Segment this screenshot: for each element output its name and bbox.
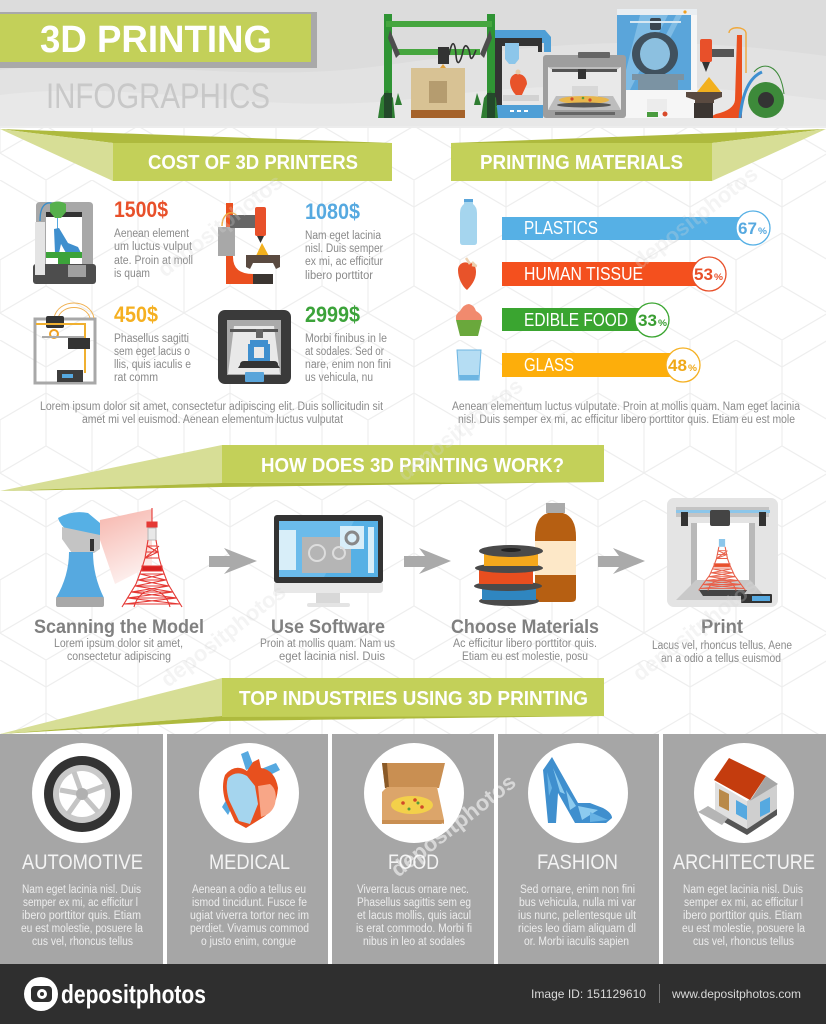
watermarks: depositphotos <box>628 573 762 686</box>
bar: plastics: % <box>758 226 767 236</box>
price: 450$: 450$ <box>114 302 158 327</box>
text: 2999$ description <box>305 333 391 384</box>
heading: food: FOOD <box>388 851 439 874</box>
text: 1500$ description: um luctus vulput <box>114 241 193 253</box>
printer: grey box with pizza <box>543 52 626 118</box>
step 1 text: Lorem ipsum dolor sit amet, <box>54 638 183 650</box>
text: food <box>356 884 472 948</box>
text: 450$ description: sem eget lacus o <box>114 346 190 358</box>
bar: plastics: 67 <box>738 219 757 238</box>
website: www.depositphotos.com <box>671 987 801 1001</box>
text: food: Viverra lacus ornare nec. <box>357 884 469 896</box>
text: 450$ description: rat comm <box>114 372 158 384</box>
arrow: step 3 to 4 <box>598 548 645 574</box>
printer: robot arm with spool <box>686 28 784 118</box>
printed tower <box>699 539 745 590</box>
icon: filament spools and bottle <box>474 503 576 606</box>
bar: glass: 48 <box>668 356 687 375</box>
icon: plastic bottle <box>460 199 477 245</box>
step 3 text: Ac efficitur libero porttitor quis. <box>453 638 597 650</box>
text: 1080$ description: ex mi, ac efficitur <box>305 256 383 268</box>
step 1 text: consectetur adipiscing <box>67 651 171 663</box>
header band <box>0 0 826 128</box>
text: fashion <box>518 884 637 948</box>
panel: automotive <box>0 734 163 964</box>
text: 2999$ description: us vehicula, nu <box>305 372 373 384</box>
icon: 3D scanner and tower <box>56 508 182 607</box>
bar: edible food <box>502 303 669 337</box>
printer: green frame with box <box>378 14 498 118</box>
watermarks: depositphotos <box>628 161 762 274</box>
price: 2999$: 2999$ <box>305 302 360 327</box>
text: 1080$ description: nisl. Duis semper <box>305 243 383 255</box>
text: medical: o justo enim, congue <box>201 936 296 948</box>
panel: medical <box>167 734 328 964</box>
bar: glass <box>502 348 700 382</box>
text: 450$ description <box>114 333 191 384</box>
text: food: is erat commodo. Morbi fi <box>356 923 472 935</box>
subtitle: INFOGRAPHICS <box>46 77 270 116</box>
title banner <box>0 12 317 68</box>
step 4 text: an a odio a tellus euismod <box>661 653 781 665</box>
heading: automotive: AUTOMOTIVE <box>22 851 143 874</box>
text: food: nibus in leo at sodales <box>363 936 465 948</box>
bar: human tissue: 53 <box>694 265 713 284</box>
text: materials summary: nisl. Duis semper ex mi, ac efficitur libero porttitor quis. Etiam eu est mole <box>458 414 795 426</box>
text: architecture: ibero porttitor quis. Etiam <box>683 910 802 922</box>
bar: edible food: % <box>658 318 667 328</box>
text: 1080$ description: Nam eget lacinia <box>305 230 382 242</box>
text: 1080$ description <box>305 230 383 282</box>
lattice tower <box>122 508 182 607</box>
arrow: step 2 to 3 <box>404 548 451 574</box>
step 1 heading: Scanning the Model <box>34 617 204 638</box>
printer: tall blue and white cabinet <box>617 9 697 118</box>
icon: monitor with software <box>274 515 383 607</box>
panel: fashion <box>498 734 659 964</box>
price: 1500$: 1500$ <box>114 197 168 222</box>
step 3 heading: Choose Materials <box>451 617 599 638</box>
text: automotive: ibero porttitor quis. Etiam <box>22 910 141 922</box>
text: medical: ismod tincidunt. Fusce fe <box>192 897 307 909</box>
footer <box>0 964 826 1024</box>
ribbon: printing materials: PRINTING MATERIALS <box>480 152 683 174</box>
text: food: Phasellus sagittis sem eg <box>357 897 471 909</box>
text: cost summary: amet mi vel euismod. Aenean elementum luctus vulputat <box>82 414 344 426</box>
text: architecture: eu est molestie, posuere la <box>682 923 806 935</box>
bar: edible food: EDIBLE FOOD <box>524 310 628 330</box>
text: automotive: eu est molestie, posuere la <box>21 923 144 935</box>
text: 450$ description: llis, quis iaculis e <box>114 359 191 371</box>
text: automotive <box>21 884 144 948</box>
panel: architecture <box>663 734 826 964</box>
icon: heart tissue <box>458 258 477 290</box>
text: cost summary: Lorem ipsum dolor sit amet, consectetur adipiscing elit. Duis sollicitudin sit <box>40 401 384 413</box>
text: food: et lacus mollis, quis iacul <box>357 910 471 922</box>
text: medical: perdiet. Vivamus commod <box>190 923 309 935</box>
icon: heart <box>222 751 280 828</box>
text: fashion: bus vehicula, nulla mi var <box>519 897 636 909</box>
text: architecture: Nam eget lacinia nisl. Duis <box>683 884 803 896</box>
text: medical: Aenean a odio a tellus eu <box>192 884 306 896</box>
text: fashion: Sed ornare, enim non fini <box>520 884 635 896</box>
printer: blue frame with heart <box>492 30 551 118</box>
icon: shoe printer <box>33 202 96 284</box>
panel: process steps <box>34 498 792 665</box>
icon: pizza box <box>382 763 445 824</box>
watermarks <box>153 161 762 882</box>
bar: glass: GLASS <box>524 355 574 375</box>
bar: plastics: PLASTICS <box>524 218 598 238</box>
icon: open frame printer <box>35 303 95 383</box>
text: 2999$ description: Morbi finibus in le <box>305 333 387 345</box>
step 1 text <box>54 638 183 663</box>
panel: materials bar chart <box>452 199 801 426</box>
ribbon: top industries: TOP INDUSTRIES USING 3D PRINTING <box>239 688 588 710</box>
step 2 heading: Use Software <box>271 617 385 638</box>
bar: human tissue: % <box>714 272 723 282</box>
text: 1500$ description <box>114 228 193 280</box>
text: medical <box>190 884 309 948</box>
logo wordmark: depositphotos <box>61 979 206 1009</box>
text: architecture <box>682 884 806 948</box>
text: 2999$ description: at sodales. Sed or <box>305 346 384 358</box>
text: architecture: cus vel, rhoncus tellus <box>693 936 794 948</box>
step 4 heading: Print <box>701 617 744 638</box>
step 3 text: Etiam eu est molestie, posu <box>462 651 588 663</box>
text: automotive: semper ex mi, ac efficitur l <box>23 897 138 909</box>
icon: faceted high heel <box>543 757 612 823</box>
watermarks: depositphotos <box>153 169 287 282</box>
text: materials summary: Aenean elementum luctus vulputate. Proin at mollis quam. Nam eget lacinia <box>452 401 801 413</box>
watermarks: depositphotos <box>156 579 290 692</box>
icon: tyre <box>44 756 120 832</box>
step 4 text: Lacus vel, rhoncus tellus. Aene <box>652 640 792 652</box>
text: 450$ description: Phasellus sagitti <box>114 333 189 345</box>
text: fashion: ricies leo diam aliquam dl <box>518 923 636 935</box>
ribbon: how does 3D printing work: HOW DOES 3D PRINTING WORK? <box>261 455 564 477</box>
heading: medical: MEDICAL <box>209 851 290 874</box>
text: automotive: cus vel, rhoncus tellus <box>32 936 133 948</box>
text: 1080$ description: libero porttitor <box>305 270 373 282</box>
text: 1500$ description: ate. Proin at moll <box>114 255 193 267</box>
ribbon: printing materials <box>451 129 826 181</box>
arrow: step 1 to 2 <box>209 548 257 574</box>
step 4 text <box>652 640 792 665</box>
bar: human tissue: HUMAN TISSUE <box>524 264 643 284</box>
bar: edible food: 33 <box>638 311 657 330</box>
icon: cupcake <box>456 304 482 336</box>
panel: cost of printers <box>33 197 391 426</box>
icon: robot arm printer <box>218 203 280 284</box>
text: materials summary <box>452 401 801 426</box>
price: 1080$: 1080$ <box>305 199 360 224</box>
step 3 text <box>453 638 597 663</box>
text: automotive: Nam eget lacinia nisl. Duis <box>22 884 141 896</box>
title banner: 3D PRINTING <box>40 19 272 61</box>
panel: food <box>332 734 494 964</box>
text: 1500$ description: is quam <box>114 268 150 280</box>
text: fashion: ius nunc, pellentesque ult <box>518 910 637 922</box>
text: medical: ugiat viverra tortor nec im <box>190 910 309 922</box>
heading: fashion: FASHION <box>537 851 618 874</box>
step 2 text: eget lacinia nisl. Duis <box>279 651 385 663</box>
ribbon: cost of 3D printers: COST OF 3D PRINTERS <box>148 152 358 174</box>
step 2 text: Proin at mollis quam. Nam us <box>260 638 395 650</box>
step 2 text <box>260 638 395 663</box>
icon: enclosed dark printer <box>218 310 291 384</box>
text: fashion: or. Morbi iaculis sapien <box>524 936 629 948</box>
ribbon: top industries <box>0 678 604 734</box>
text: cost summary <box>40 401 384 426</box>
watermarks: depositphotos <box>386 769 520 882</box>
illustration: row of 3D printers <box>378 9 784 118</box>
icon: house <box>698 758 778 835</box>
bar: plastics <box>502 211 770 245</box>
ribbon: how does 3D printing work <box>0 445 604 491</box>
text: 2999$ description: nare, enim non fini <box>305 359 391 371</box>
watermarks: depositphotos <box>393 373 527 486</box>
text: 1500$ description: Aenean element <box>114 228 190 240</box>
icon: printer printing tower <box>667 498 778 607</box>
bar: glass: % <box>688 363 697 373</box>
bar: human tissue <box>502 257 726 291</box>
ribbon: cost of 3D printers <box>0 129 392 181</box>
image id: Image ID: 151129610 <box>531 987 646 1001</box>
logo mark <box>24 977 58 1011</box>
icon: glass <box>457 350 481 380</box>
text: architecture: semper ex mi, ac efficitur l <box>684 897 803 909</box>
